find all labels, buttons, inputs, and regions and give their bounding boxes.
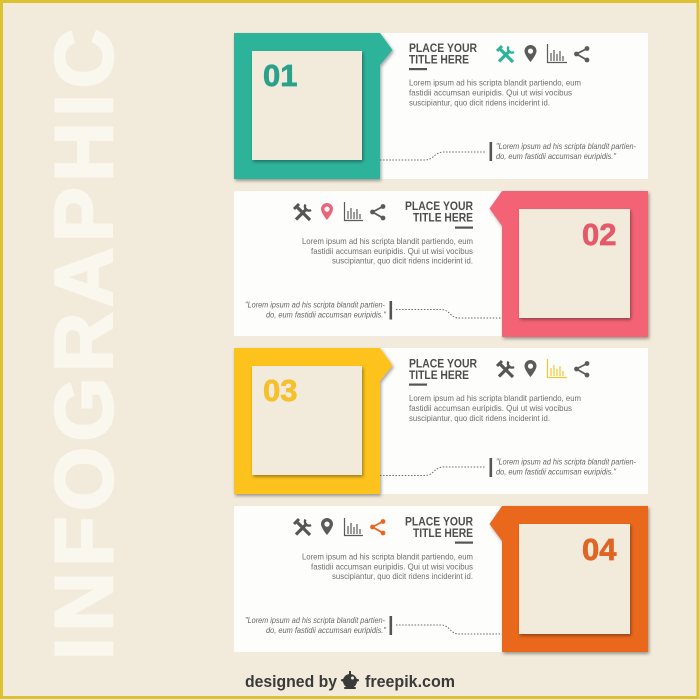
card background 02 <box>234 191 648 336</box>
body text 04: fastidii accumsan euripidis. Qui ut wisi vocibus <box>311 562 473 572</box>
connector 01 <box>380 152 485 160</box>
heading 03: PLACE YOUR <box>409 358 478 370</box>
icon: tools 03 <box>497 361 514 377</box>
body text 03: suscipiantur, quo dicit ridens inciderint id. <box>409 413 550 423</box>
panel: step 03 <box>234 348 648 494</box>
pink ribbon <box>490 191 648 337</box>
body text 01: fastidii accumsan euripidis. Qui ut wisi vocibus <box>409 88 572 98</box>
connector 03 <box>380 467 485 476</box>
icon: share 02 <box>370 204 385 220</box>
heading underline 01 <box>409 68 427 70</box>
content square 01 <box>252 51 362 160</box>
quote text 03: "Lorem ipsum ad his scripta blandit partien- <box>496 458 636 466</box>
connector 02 <box>396 310 502 318</box>
quote text 01: do, eum fastidii accumsan euripidis." <box>496 152 617 161</box>
icon: pin 03 <box>524 360 536 377</box>
quote text 02: "Lorem ipsum ad his scripta blandit partien- <box>245 300 385 310</box>
quote text 04: do, eum fastidii accumsan euripidis." <box>266 626 387 635</box>
icon: tools 01 <box>497 46 514 62</box>
icon: pin 01 <box>524 45 536 62</box>
vertical title: INFOGRAPHIC <box>39 29 130 660</box>
yellow ribbon <box>234 348 392 494</box>
body text 02: fastidii accumsan euripidis. Qui ut wisi vocibus <box>311 246 473 256</box>
body text 02: suscipiantur, quo dicit ridens inciderint id. <box>332 256 473 266</box>
quote text 01: "Lorem ipsum ad his scripta blandit partien- <box>496 142 636 151</box>
number 03: 03 <box>263 373 297 408</box>
card background 04 <box>234 506 648 652</box>
content square 03 <box>252 366 362 475</box>
quote bar 02 <box>390 301 392 320</box>
number 02: 02 <box>582 217 616 252</box>
icon: bar chart 01 <box>548 44 567 62</box>
icon: tools 04 <box>294 519 311 535</box>
heading 04: PLACE YOUR <box>405 516 474 528</box>
quote text 02: do, eum fastidii accumsan euripidis." <box>266 310 387 320</box>
heading underline 02 <box>455 226 473 229</box>
credit text right: freepik.com <box>365 673 455 691</box>
icon: tools 02 <box>294 204 311 220</box>
icon: share 03 <box>574 361 589 377</box>
teal ribbon <box>234 33 392 179</box>
heading 02: TITLE HERE <box>413 212 473 224</box>
content square 02 <box>519 209 630 318</box>
body text 04: suscipiantur, quo dicit ridens inciderint id. <box>332 571 473 581</box>
quote bar 04 <box>390 616 392 635</box>
card background 01 <box>234 33 648 179</box>
icon: freepik mascot <box>341 671 359 689</box>
icon: bar chart 03 <box>548 359 567 378</box>
content square 04 <box>519 524 630 634</box>
heading 02: PLACE YOUR <box>405 200 474 213</box>
body text 04: Lorem ipsum ad his scripta blandit partiendo, eum <box>302 552 473 562</box>
number 01: 01 <box>263 58 297 93</box>
credit text left: designed by <box>245 673 338 691</box>
heading underline 03 <box>409 384 427 386</box>
quote text 03: do, eum fastidii accumsan euripidis." <box>496 468 617 476</box>
number 04: 04 <box>582 532 617 567</box>
body text 03: fastidii accumsan euripidis. Qui ut wisi vocibus <box>409 403 572 413</box>
quote bar 03 <box>490 458 492 477</box>
card background 03 <box>234 348 648 494</box>
body text 03: Lorem ipsum ad his scripta blandit partiendo, eum <box>409 393 581 403</box>
orange ribbon <box>490 506 648 652</box>
quote text 04: "Lorem ipsum ad his scripta blandit partien- <box>245 616 385 625</box>
body text 02: Lorem ipsum ad his scripta blandit partiendo, eum <box>302 236 473 246</box>
icon: share 04 <box>370 519 385 535</box>
heading 04: TITLE HERE <box>413 527 473 540</box>
icon: bar chart 02 <box>344 202 363 220</box>
icon: pin 04 <box>321 518 333 535</box>
panel: step 01 <box>234 33 648 179</box>
connector 04 <box>396 625 502 634</box>
heading 03: TITLE HERE <box>409 369 469 382</box>
panel: step 02 <box>234 191 648 337</box>
heading underline 04 <box>455 542 473 544</box>
panel: step 04 <box>234 506 648 652</box>
body text 01: Lorem ipsum ad his scripta blandit partiendo, eum <box>409 78 581 88</box>
footer credit <box>245 671 455 691</box>
quote bar 01 <box>490 142 492 161</box>
heading 01: TITLE HERE <box>409 54 469 66</box>
heading 01: PLACE YOUR <box>409 42 478 55</box>
icon: pin 02 <box>321 203 333 220</box>
icon: bar chart 04 <box>344 518 363 536</box>
icon: share 01 <box>574 46 589 62</box>
body text 01: suscipiantur, quo dicit ridens inciderint id. <box>409 98 550 108</box>
